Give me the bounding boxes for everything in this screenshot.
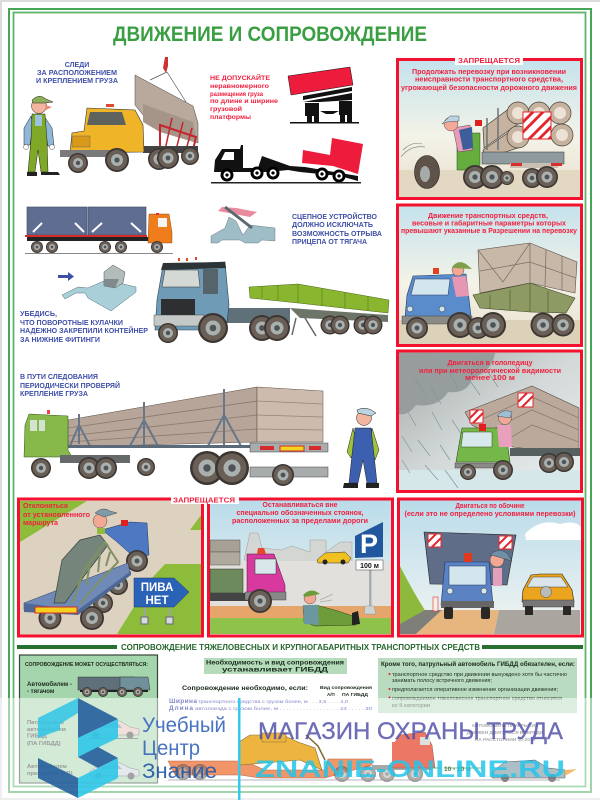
text: stopping rule: специально обозначенных стоянок,	[236, 509, 364, 517]
list: conditions: сопровождаемое тяжеловесное транспортное средство относится	[392, 696, 562, 702]
text: route rule: от установленного	[23, 512, 90, 519]
text: check twist locks: ЗА НИЖНИЕ ФИТИНГИ	[20, 337, 100, 344]
text: route rule	[23, 503, 90, 527]
watermark: website: ZNANIE-ONLINE.RU	[255, 756, 565, 783]
icon: yellow truck carrying concrete slab under crane hook	[60, 57, 199, 173]
text: tractor escort: Автомобилем -	[27, 681, 72, 688]
text: faulty vehicle rule: неисправности транспортного средства,	[415, 76, 563, 84]
watermark: training centre name: Центр	[142, 737, 200, 760]
text: coupling device: ВОЗМОЖНОСТЬ ОТРЫВА	[292, 231, 382, 238]
watermark: divider	[238, 698, 240, 800]
text: uneven cargo warning: размещения груза	[210, 91, 263, 98]
text: uneven cargo warning: платформы	[210, 114, 251, 121]
list: conditions: транспортное средство при движении вынуждено хотя бы частично	[392, 672, 567, 678]
icon: green truck with long concrete load	[24, 387, 328, 486]
icon: blue truck with bridge girder on trailer	[24, 509, 149, 630]
text: route rule: Отклоняться	[23, 503, 68, 510]
table: width and length limits: Ширина	[169, 698, 197, 705]
panel: forbidden - leaving route	[18, 499, 202, 636]
text: watch cargo fastening: И КРЕПЛЕНИЕМ ГРУЗА	[36, 78, 118, 85]
text: coupling device: ПРИЦЕПА ОТ ТЯГАЧА	[292, 239, 367, 246]
icon: coupling device	[211, 207, 275, 243]
table: width and length limits: ПА ГИБДД	[342, 692, 369, 697]
text: tractor escort	[27, 681, 72, 695]
icon: resting driver	[303, 591, 360, 626]
illustration: convoy with bulldozer on lowboy: ДОЛЖЕН ДВИГАТЬСЯ ВПЕРЕДИ	[467, 730, 544, 736]
icon: twist lock	[62, 265, 136, 311]
heading: forbidden	[455, 55, 523, 65]
text: check twist locks: УБЕДИСЬ,	[20, 311, 57, 318]
list: conditions: занимать полосу встречного движения;	[392, 678, 492, 684]
sign: beer joke	[134, 578, 189, 624]
text: shoulder rule	[404, 502, 576, 518]
icon: blue truck with wide load, front view	[424, 532, 516, 619]
text: ice rule: или при метеорологической видимости	[419, 367, 561, 375]
text: check fastening on route: ПЕРИОДИЧЕСКИ ПРОВЕРЯЙ	[20, 381, 120, 390]
heading: forbidden: ЗАПРЕЩАЕТСЯ	[173, 498, 235, 504]
icon: cover car	[90, 763, 139, 780]
icon: blue tractor with green flatbed trailer	[154, 257, 389, 343]
text: stopping rule: Останавливаться вне	[262, 502, 338, 509]
heading: forbidden	[171, 494, 239, 504]
text: coupling device: ДОЛЖНО ИСКЛЮЧАТЬ	[292, 222, 373, 229]
icon: worker in blue overalls	[343, 408, 379, 488]
panel: forbidden - ice and low visibility	[398, 351, 582, 492]
text: check twist locks: ЧТО ПОВОРОТНЫЕ КУЛАЧКИ	[20, 320, 123, 327]
illustration: convoy with bulldozer on lowboy: НА РАССТОЯНИИ 10-20 М	[475, 737, 535, 743]
text: uneven cargo warning: по длине и ширине	[210, 98, 278, 105]
text: stopping rule	[232, 502, 368, 525]
watermark: training centre name: Знание	[142, 760, 217, 783]
icon: patrol car	[88, 721, 139, 739]
icon: yellow car	[317, 552, 351, 564]
illustration: grass patches	[20, 501, 201, 634]
text: escort necessary when: Сопровождение необходимо, если:	[182, 684, 308, 692]
text: oversize rule: превышают указанные в Разрешении на перевозку	[401, 228, 577, 235]
text: escort panel heading: СОПРОВОЖДЕНИЕ МОЖЕТ ОСУЩЕСТВЛЯТЬСЯ:	[25, 662, 148, 668]
icon: truck losing a wheel with pipes	[399, 102, 580, 197]
table: width and length limits: А/П	[327, 692, 335, 697]
icon: parking sign with 100 m plate	[355, 522, 383, 614]
text: shoulder rule: (если это не определено условиями перевозки)	[404, 511, 576, 518]
list: conditions: предполагается оперативное изменение организации движения;	[392, 687, 558, 693]
text: oversize rule: Движение транспортных средств,	[428, 213, 548, 220]
text: patrol car escort: (ПА ГИБДД)	[27, 741, 61, 747]
text: cover car escort: прикрытия (АП)	[27, 771, 73, 777]
table: width and length limits: автопоезда с грузом более, м . . . . . . . . . . . . . . . . . . 24 . . . . . 30	[195, 706, 373, 711]
icon: black tractor with tilted red load	[211, 138, 363, 184]
text: cover car escort: Автомобилем	[27, 763, 67, 770]
table: width and length limits: Вид сопровождения	[320, 685, 372, 690]
text: ice rule: Двигаться в гололедицу	[448, 360, 533, 367]
text: route rule: маршрута	[23, 520, 58, 527]
icon: overloaded truck	[399, 243, 580, 344]
icon: green truck in rain	[455, 386, 580, 480]
panel: forbidden - driving on shoulder	[398, 499, 582, 636]
text: shoulder rule: Двигаться по обочине	[456, 502, 525, 510]
text: uneven cargo warning: грузовой	[210, 105, 242, 113]
watermark: training centre name	[142, 714, 226, 783]
text: patrol car escort: ГИБДД	[27, 734, 48, 740]
callout: necessity set by traffic police: Необходимость и вид сопровождения	[206, 658, 344, 666]
text: patrol car escort	[27, 720, 66, 747]
list: conditions: ко II категории	[392, 703, 430, 709]
text: coupling device: СЦЕПНОЕ УСТРОЙСТВО	[292, 212, 378, 221]
text: patrol car escort: Патрульным	[27, 720, 64, 726]
icon: black truck rear with uneven red load	[288, 67, 359, 124]
text: tractor escort: - тягачом	[27, 689, 55, 695]
text: check fastening on route: КРЕПЛЕНИЕ ГРУЗА	[20, 391, 88, 398]
illustration: convoy with bulldozer on lowboy: АВТОМОБИЛЬ ПРИКРЫТИЯ	[472, 723, 539, 729]
watermark wash	[0, 698, 600, 800]
panel: escort types	[20, 655, 158, 783]
text: faulty vehicle rule	[401, 69, 577, 92]
text: check fastening on route: В ПУТИ СЛЕДОВАНИЯ	[20, 374, 98, 381]
text: ice rule	[419, 360, 561, 382]
watermark: logo	[38, 698, 118, 798]
illustration: convoy with bulldozer on lowboy	[168, 723, 577, 782]
text: oversize rule	[401, 213, 577, 235]
section heading: escort of heavy vehicles: СОПРОВОЖДЕНИЕ ТЯЖЕЛОВЕСНЫХ И КРУПНОГАБАРИТНЫХ ТРАНСПОРТНЫХ СРЕДСТВ	[121, 643, 480, 652]
text: uneven cargo warning: НЕ ДОПУСКАЙТЕ	[210, 73, 270, 82]
text: conditions heading: Кроме того, патрульный автомобиль ГИБДД обязателен, если:	[381, 660, 575, 668]
title: ДВИЖЕНИЕ И СОПРОВОЖДЕНИЕ	[113, 22, 427, 46]
panel: forbidden - oversize cargo	[398, 205, 582, 346]
text: cover car escort	[27, 763, 73, 777]
watermark: training centre name: Учебный	[142, 714, 226, 737]
icon: parking sign with 100 m plate: 100 м	[360, 563, 379, 570]
text: oversize rule: весовые и габаритные параметры которых	[412, 220, 566, 228]
text: watch cargo fastening: ЗА РАСПОЛОЖЕНИЕМ	[37, 70, 117, 77]
panel: forbidden - stopping off parking	[171, 494, 392, 636]
illustration: convoy with bulldozer on lowboy: 10 - 20 м	[444, 766, 471, 773]
watermark: shop name: МАГАЗИН ОХРАНЫ ТРУДА	[258, 718, 563, 745]
heading: forbidden: ЗАПРЕЩАЕТСЯ	[458, 58, 520, 65]
list: conditions	[388, 672, 567, 709]
text: stopping rule: расположенных за пределами дороги	[232, 518, 368, 525]
sign: beer joke: НЕТ	[146, 595, 168, 607]
table: width and length limits: транспортного средства с грузом более, м . . . 3,5 . . . . 4,0	[198, 699, 349, 704]
icon: military escort truck	[78, 677, 150, 697]
text: patrol car escort: автомобилем	[27, 726, 66, 733]
callout: necessity set by traffic police	[204, 658, 347, 674]
section heading: escort of heavy vehicles	[17, 643, 583, 652]
text: check twist locks	[20, 311, 148, 344]
text: uneven cargo warning	[210, 73, 278, 121]
panel: forbidden - faulty vehicle	[398, 55, 582, 198]
icon: worker in green overalls	[24, 96, 60, 176]
text: check fastening on route	[20, 374, 120, 398]
sign: beer joke: ПИВА	[141, 582, 173, 594]
icon: yellow car front view	[522, 574, 574, 615]
illustration: road and hill	[400, 522, 581, 634]
table: width and length limits: Длина	[169, 705, 193, 712]
panel: patrol car mandatory conditions	[378, 658, 577, 713]
text: check twist locks: НАДЕЖНО ЗАКРЕПИЛИ КОНТЕЙНЕР	[20, 326, 148, 335]
text: coupling device	[292, 212, 382, 246]
icon: container truck	[25, 207, 173, 254]
arrow: blue pointer	[58, 272, 74, 281]
icon: magenta truck	[210, 540, 286, 613]
callout: necessity set by traffic police: устанавливает ГИБДД	[222, 666, 329, 674]
text: uneven cargo warning: неравномерного	[210, 83, 269, 90]
table: width and length limits	[169, 685, 373, 712]
text: faulty vehicle rule: угрожающей безопасности дорожного движения	[401, 84, 577, 92]
text: ice rule: менее 100 м	[465, 375, 515, 382]
text: faulty vehicle rule: Продолжать перевозку при возникновении	[412, 69, 566, 76]
text: watch cargo fastening	[36, 62, 118, 85]
illustration: city and wall	[210, 533, 391, 634]
illustration: storm clouds and rain	[399, 353, 580, 490]
text: watch cargo fastening: СЛЕДИ	[65, 62, 89, 69]
icon: parking sign with 100 m plate: P	[360, 529, 378, 559]
